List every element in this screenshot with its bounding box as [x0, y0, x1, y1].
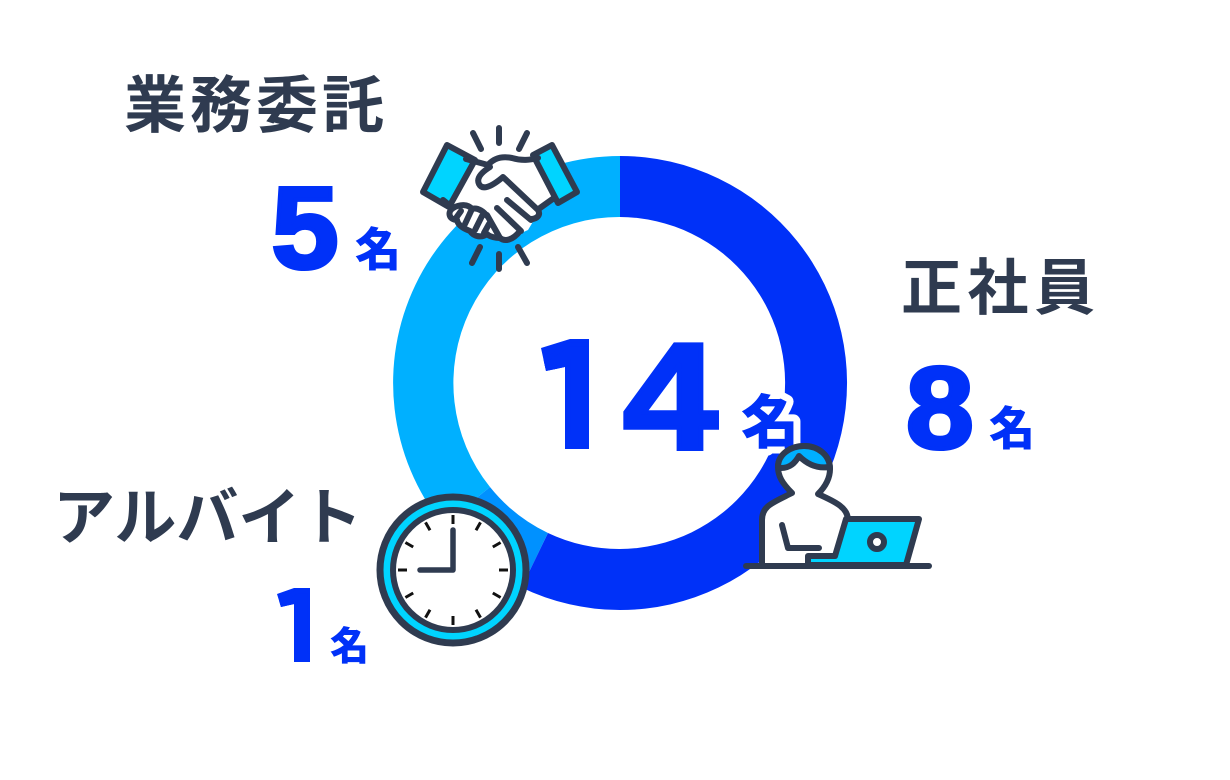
- value: full-time: 8: [906, 344, 974, 473]
- clock hands: [420, 530, 453, 570]
- laptop: [808, 519, 919, 565]
- center total: 1: [533, 312, 618, 482]
- unit: full-time: 名: [989, 403, 1035, 455]
- label: part-time: [60, 486, 366, 664]
- segment: full-time: [522, 156, 847, 610]
- label: contract: 業務委託: [124, 72, 388, 141]
- hour ticks: [398, 515, 508, 625]
- icon: person with laptop: [746, 446, 929, 566]
- unit: part-time: 名: [330, 626, 369, 669]
- unit: contract: 名: [355, 224, 401, 276]
- donut chart: [393, 156, 847, 610]
- clock face: [380, 497, 526, 643]
- label: full-time: [901, 254, 1101, 473]
- center unit: 名: [741, 391, 799, 456]
- value: contract: 5: [272, 164, 339, 293]
- icon: handshake: [423, 128, 577, 269]
- hair: [780, 447, 829, 468]
- value: part-time: [277, 588, 310, 662]
- segment: part-time: [443, 487, 548, 588]
- label: part-time: 1: [272, 570, 329, 684]
- label: full-time: 正社員: [901, 254, 1101, 322]
- center total: 4: [623, 312, 718, 482]
- sparkles: [472, 128, 527, 269]
- cuff left: [423, 145, 475, 207]
- desk: [746, 563, 929, 569]
- center total: [541, 339, 800, 456]
- person: [762, 446, 848, 566]
- icon: clock: [380, 497, 526, 643]
- label: contract: [124, 72, 401, 293]
- segment: contract: [393, 156, 620, 525]
- arm: [782, 525, 819, 548]
- label: part-time: アルバイト: [53, 484, 362, 553]
- cuff right: [533, 145, 577, 203]
